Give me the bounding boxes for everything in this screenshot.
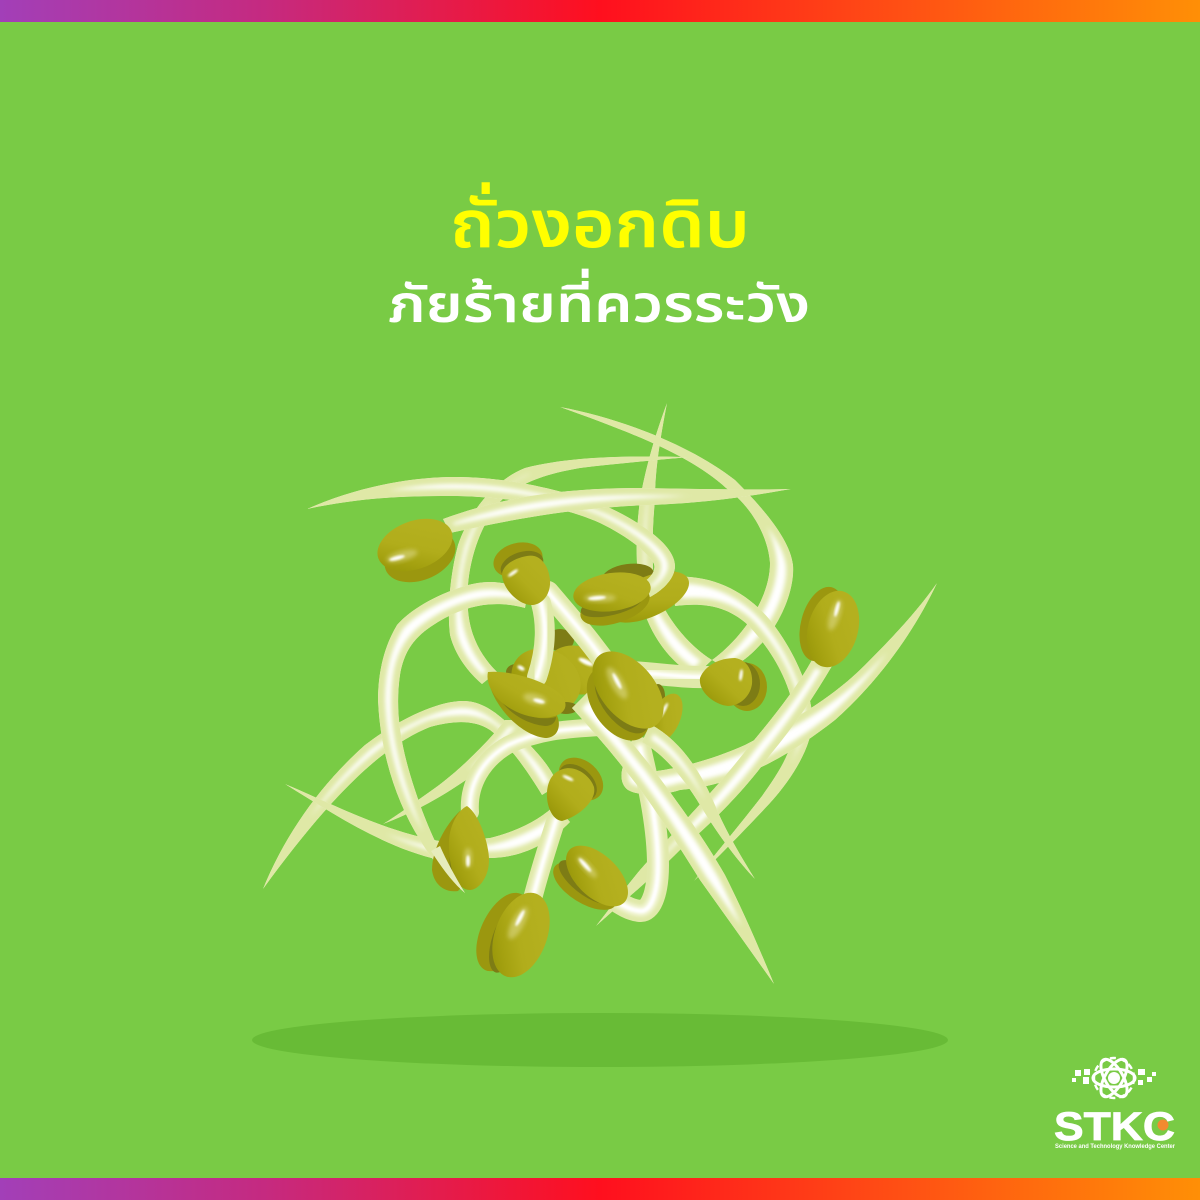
- bean: upper centre right: [571, 568, 654, 633]
- bean: central large: [574, 638, 678, 752]
- bean: lower left teardrop: [432, 806, 489, 891]
- sprout: stem through centre: [548, 592, 612, 672]
- sprout: upright stem to top tip: [637, 403, 712, 676]
- logo wordmark: STKC: [1054, 1105, 1175, 1149]
- bean: rear right bean behind hook: [600, 560, 696, 633]
- bean: bottom large: [465, 885, 560, 985]
- title line 2: ภัยร้ายที่ควรระวัง: [388, 268, 810, 334]
- logo atom icon: [1093, 1055, 1135, 1101]
- sprout: upper curved stem from loop: [449, 456, 688, 684]
- bottom gradient bar: [0, 1178, 1200, 1200]
- sprout tail over lower left bean: [431, 846, 465, 893]
- logo orange dot: [1158, 1120, 1168, 1130]
- sprout: left wide stem to lower tip: [378, 582, 528, 893]
- bean: upper left: [370, 509, 463, 592]
- top gradient bar: [0, 0, 1200, 22]
- bean: behind lower right of centre: [643, 684, 689, 747]
- bean: far right: [792, 582, 867, 673]
- sprout: short connecting stem: [625, 672, 708, 677]
- sprout: short stem in front of rear beans: [537, 603, 545, 677]
- bean: central left teardrop: [487, 672, 566, 738]
- sprout: arch ending at lower right tip: [672, 577, 813, 881]
- sprout: lower left stem to left tip: [285, 784, 570, 860]
- title line 1: ถั่วงอกดิบ: [450, 182, 750, 261]
- bean: bottom right: [545, 834, 639, 919]
- bean: right teardrop: [700, 658, 767, 711]
- logo: STKC: [1054, 1055, 1176, 1150]
- sprout: largest diagonal stem to bottom tip: [572, 690, 774, 984]
- sprout: hooked stem at lower centre: [610, 748, 658, 911]
- bean: upper centre teardrop: [489, 537, 550, 605]
- logo pixel squares: [1072, 1069, 1156, 1085]
- sprout: diagonal stem to lower left tip: [596, 660, 832, 926]
- sprout: long top stem with hook: [307, 477, 675, 597]
- bean: rear central beans: [500, 629, 613, 724]
- sprout: small loop stem: [470, 727, 600, 812]
- sprout: left bow stem to lower left tip: [263, 701, 558, 889]
- sprout: long stem from top left bean: [443, 488, 791, 533]
- sprout: small stem to left tip: [383, 720, 530, 824]
- sprout: central stem to lower right tip: [642, 724, 755, 879]
- ground shadow: [252, 1013, 948, 1067]
- illustration: bean sprouts: [263, 403, 937, 984]
- bean: lower centre teardrop: [547, 749, 612, 821]
- sprout: stem from bottom bean: [533, 820, 556, 897]
- sprout: large arc from top tip: [560, 407, 793, 668]
- logo tagline: Science and Technology Knowledge Center: [1055, 1144, 1176, 1150]
- sprout: long curve to upper right tip: [621, 583, 937, 795]
- title: [388, 182, 810, 334]
